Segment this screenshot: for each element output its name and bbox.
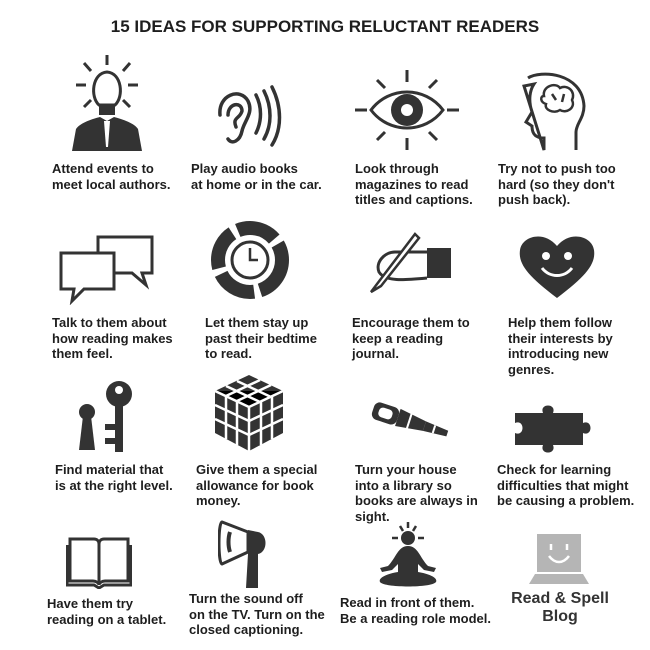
icon: heart smile: [520, 236, 594, 298]
text: interests: their interests by: [508, 330, 613, 346]
logo: Read & Spell Blog: [511, 534, 609, 625]
text: difficulties: Check for learning: [497, 462, 611, 477]
text: journal: keep a reading: [352, 330, 443, 346]
text: bedtime: [205, 315, 317, 361]
text: push: hard (so they don't: [498, 176, 614, 192]
text: authors: [52, 161, 170, 192]
icon: puzzle piece: [515, 406, 590, 452]
text: library: [355, 462, 478, 524]
text: bedtime: to read.: [205, 346, 252, 361]
text: journal: journal.: [352, 346, 399, 361]
text: captions: Turn the sound off: [189, 591, 303, 606]
text: tablet: [47, 596, 166, 626]
text: talk: [52, 315, 173, 361]
text: interests: Help them follow: [508, 315, 612, 330]
text: magazines: titles and captions.: [355, 192, 473, 207]
icon: laptop smile: [529, 534, 589, 584]
text: captions: [189, 591, 325, 637]
text: allowance: allowance for book: [196, 478, 314, 492]
text: allowance: money.: [196, 493, 241, 508]
text: push: [498, 161, 616, 207]
text: allowance: Give them a special: [196, 462, 317, 477]
icon: eye: [355, 70, 459, 150]
icon: megaphone: [218, 520, 266, 588]
text: role model: Be a reading role model.: [340, 610, 491, 626]
text: difficulties: [497, 462, 634, 508]
text: library: Turn your house: [355, 462, 457, 477]
text: authors: Attend events to: [52, 161, 154, 176]
text: interests: [508, 315, 613, 376]
text: level: is at the right level.: [55, 478, 173, 492]
text: interests: genres.: [508, 362, 554, 376]
text: authors: meet local authors.: [52, 176, 170, 192]
text: talk: how reading makes: [52, 330, 173, 346]
text: allowance: [196, 462, 317, 508]
icon: open book: [66, 538, 132, 589]
text: push: push back).: [498, 192, 570, 207]
icon: ear: [218, 85, 282, 147]
text: role model: [340, 595, 491, 626]
text: push: Try not to push too: [498, 161, 616, 176]
icon: meditation: [380, 522, 436, 586]
text: difficulties: difficulties that might: [497, 478, 628, 492]
text: library: sight.: [355, 508, 390, 524]
text: journal: Encourage them to: [352, 315, 470, 330]
text: magazines: [355, 161, 473, 207]
text: audio: at home or in the car.: [191, 176, 322, 192]
text: library: books are always in: [355, 493, 478, 508]
icon: lightbulb person: [72, 55, 142, 151]
icon: head brain: [522, 72, 586, 150]
text: tablet: Have them try: [47, 596, 133, 611]
text: talk: them feel.: [52, 346, 113, 361]
text: audio: Play audio books: [191, 161, 298, 176]
text: magazines: Look through: [355, 161, 439, 176]
text: talk: Talk to them about: [52, 315, 167, 330]
text: role model: Read in front of them.: [340, 595, 474, 610]
text: journal: [352, 315, 470, 361]
icon: clock chart: [211, 221, 289, 299]
icon: telescope: [372, 402, 448, 436]
icon: key and keyhole: [79, 381, 132, 452]
logo: Read & Spell Blog: Blog: [542, 608, 578, 625]
text: tablet: reading on a tablet.: [47, 612, 166, 626]
text: captions: on the TV. Turn on the: [189, 606, 325, 622]
text: library: into a library so: [355, 478, 452, 492]
text: bedtime: past their bedtime: [205, 330, 317, 346]
text: difficulties: be causing a problem.: [497, 493, 634, 508]
text: captions: closed captioning.: [189, 622, 303, 637]
icon: cube: [215, 375, 283, 450]
text: audio: [191, 161, 322, 192]
logo: Read & Spell Blog: Read & Spell: [511, 590, 609, 607]
icon: hand writing: [370, 232, 451, 294]
text: magazines: magazines to read: [355, 176, 468, 192]
title: 15 IDEAS FOR SUPPORTING RELUCTANT READERS: [111, 17, 539, 36]
text: level: [55, 462, 173, 492]
text: bedtime: Let them stay up: [205, 315, 308, 330]
icon: speech bubbles: [60, 236, 154, 305]
text: level: Find material that: [55, 462, 163, 477]
text: interests: introducing new: [508, 346, 608, 361]
